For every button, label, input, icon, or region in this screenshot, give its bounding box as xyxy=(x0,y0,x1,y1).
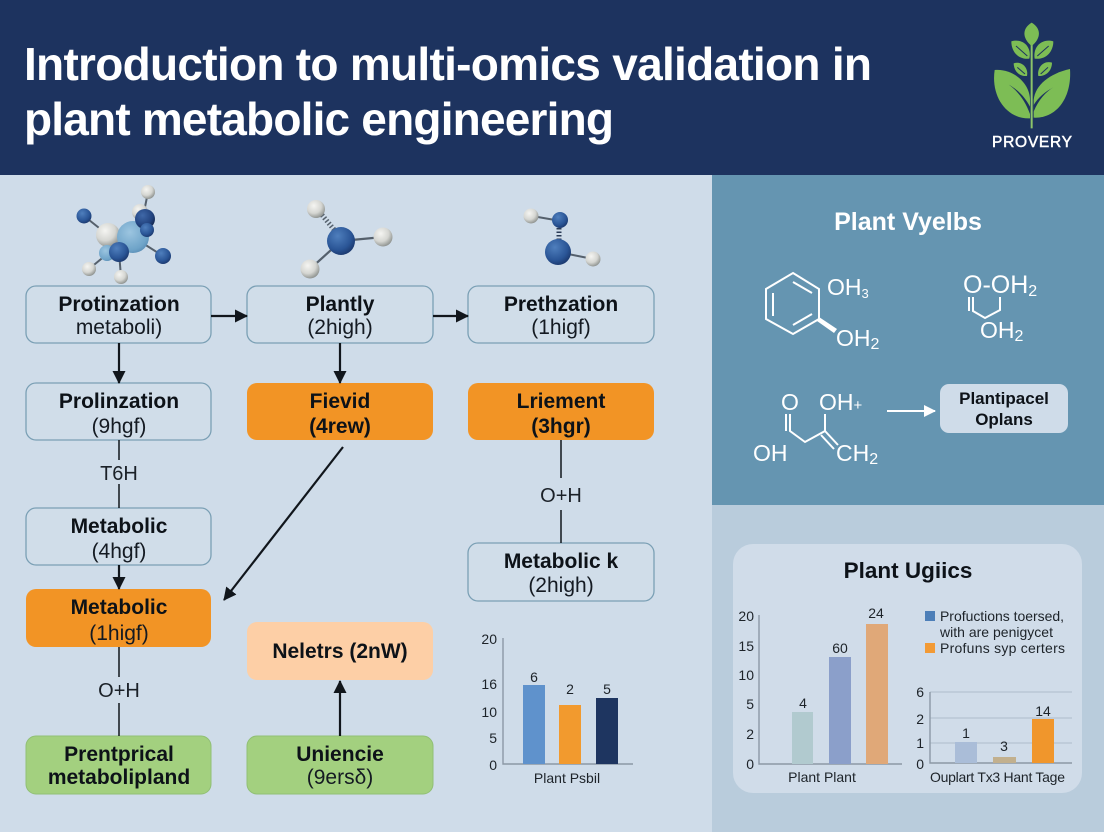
arrow: diagonal Fievid to Metabolic xyxy=(224,447,343,600)
bar chart: hant tage: 14 xyxy=(1035,703,1051,719)
bar chart: hant tage: 1 xyxy=(962,725,970,741)
bar chart: plant psbil: 5 xyxy=(489,730,497,746)
bar chart: plant plant xyxy=(738,605,902,785)
bar chart: plant plant: 24 xyxy=(868,605,884,621)
bar chart: plant plant: 10 xyxy=(738,667,754,683)
bar chart: plant psbil: 6 xyxy=(530,669,538,685)
node: Uniencie: Uniencie xyxy=(296,743,384,766)
bar chart: plant plant: 60 xyxy=(832,640,848,656)
node: Neletrs: Neletrs (2nW) xyxy=(272,640,408,663)
callout: Plantipacel Oplans: Oplans xyxy=(975,410,1033,429)
node: Prentprical metabolipland xyxy=(26,736,211,794)
title xyxy=(24,38,872,145)
bar chart: plant psbil xyxy=(481,631,633,786)
molecule: chain structure two: O xyxy=(781,389,799,415)
node: Prolinzation xyxy=(26,383,211,440)
bar chart: plant psbil: 0 xyxy=(489,757,497,773)
callout: Plantipacel Oplans: Plantipacel xyxy=(959,389,1049,408)
bar chart: plant psbil: 2 xyxy=(566,681,574,697)
header band xyxy=(0,0,1104,175)
bar chart: plant plant: 5 xyxy=(746,696,754,712)
bar chart: hant tage xyxy=(916,684,1072,785)
bar chart: plant plant: 20 xyxy=(738,608,754,624)
connector: O+H right: O+H xyxy=(540,485,582,507)
bar chart: hant tage: 0 xyxy=(916,756,924,772)
bar chart: hant tage: 1 xyxy=(916,735,924,751)
node: Prethzation: Prethzation xyxy=(504,293,618,316)
molecule: chain structure two: OH xyxy=(753,440,788,466)
node: Fievid: Fievid xyxy=(310,390,370,413)
molecule: ring structure: 3 xyxy=(862,286,869,301)
node: Metabolic 4 xyxy=(26,508,211,565)
connector: O+H left xyxy=(98,647,140,736)
node: Prentprical metabolipland: metabolipland xyxy=(48,766,190,789)
arrow: Uniencie to Neletrs xyxy=(339,681,341,736)
node: Metabolic k: Metabolic k xyxy=(504,550,618,573)
node: Lriement: Lriement xyxy=(517,390,605,413)
panel: lower right background xyxy=(712,505,1104,832)
card heading: Plant Ugiics xyxy=(844,558,972,583)
arrow: Plantly to Fievid xyxy=(339,343,341,383)
connector: T6H: T6H xyxy=(100,463,138,485)
molecule: ring structure: OH xyxy=(836,325,870,351)
node: Prolinzation: Prolinzation xyxy=(59,390,179,413)
legend: Profuctions toersed, xyxy=(940,608,1064,624)
arrow: Plantly to Prethzation xyxy=(433,315,468,317)
node: Metabolic 1: Metabolic xyxy=(71,596,168,619)
bar chart: plant psbil: 5 xyxy=(603,681,611,697)
legend: Profuns syp certers xyxy=(940,640,1065,656)
bar chart: plant plant: Plant Plant xyxy=(788,769,856,785)
node: Uniencie: (9ersδ) xyxy=(307,766,373,789)
node: Lriement xyxy=(468,383,654,440)
molecule: chain structure one: 2 xyxy=(1014,328,1024,345)
connector: T6H xyxy=(100,440,138,508)
molecule: chain structure two: OH+ xyxy=(819,389,862,415)
bar chart: plant psbil: 16 xyxy=(481,676,497,692)
connector: O+H left: O+H xyxy=(98,680,140,702)
bar chart: hant tage: Ouplart Tx3 Hant Tage xyxy=(930,769,1065,785)
molecule: ring structure: OH xyxy=(827,274,862,300)
molecule: chain structure one xyxy=(963,271,1037,345)
bar chart: plant plant: 15 xyxy=(738,638,754,654)
molecule: ring structure xyxy=(766,273,880,353)
legend: with are penigycet xyxy=(939,624,1053,640)
node: Fievid xyxy=(247,383,433,440)
molecule: cluster left xyxy=(76,185,171,284)
panel: plant pathways, right top xyxy=(712,175,1104,505)
node: Uniencie xyxy=(247,736,433,794)
node: Metabolic k: (2high) xyxy=(528,574,594,597)
node: Metabolic k xyxy=(468,543,654,601)
molecule: centre xyxy=(300,200,392,278)
node: Metabolic 1 xyxy=(26,589,211,647)
molecule: ring structure: 2 xyxy=(870,336,880,353)
node: Plantly xyxy=(247,286,433,343)
node: Metabolic 4: (4hgf) xyxy=(92,540,146,563)
bar chart: plant plant: 0 xyxy=(746,756,754,772)
molecule: chain structure two: CH xyxy=(836,440,869,466)
node: Plantly: Plantly xyxy=(306,293,375,316)
molecule: chain structure one: OH xyxy=(980,317,1014,343)
arrow to callout xyxy=(887,410,935,412)
molecule: chain structure two: 2 xyxy=(869,451,878,468)
legend xyxy=(925,608,1065,656)
node: Protinzation metaboli: Protinzation xyxy=(58,293,180,316)
panel heading: Plant Vyelbs xyxy=(834,208,982,236)
node: Fievid: (4rew) xyxy=(309,415,371,438)
node: Prentprical metabolipland: Prentprical xyxy=(64,743,174,766)
bar chart: hant tage: 6 xyxy=(916,684,924,700)
node: Prolinzation: (9hgf) xyxy=(92,415,146,438)
node: Prethzation xyxy=(468,286,654,343)
callout: Plantipacel Oplans xyxy=(940,384,1068,433)
molecule: right xyxy=(524,208,600,266)
node: Metabolic 4: Metabolic xyxy=(71,515,168,538)
molecule: chain structure one: 2 xyxy=(1028,283,1037,300)
bar chart: plant psbil: Plant Psbil xyxy=(534,770,600,786)
bar chart: hant tage: 2 xyxy=(916,711,924,727)
node: Neletrs xyxy=(247,622,433,680)
node: Metabolic 1: (1higf) xyxy=(89,622,149,645)
node: Protinzation metaboli xyxy=(26,286,211,343)
node: Protinzation metaboli: metaboli) xyxy=(76,316,162,339)
molecule: chain structure two xyxy=(753,389,878,468)
connector: O+H right xyxy=(540,440,582,543)
arrow: Protinzation to Plantly xyxy=(211,315,247,317)
molecule: chain structure one: O-OH xyxy=(963,271,1028,299)
node: Plantly: (2high) xyxy=(307,316,373,339)
node: Prethzation: (1higf) xyxy=(531,316,591,339)
bar chart: plant plant: 2 xyxy=(746,726,754,742)
panel: plant metrics card xyxy=(733,544,1082,793)
node: Lriement: (3hgr) xyxy=(531,415,591,438)
arrow: Protinzation to Prolinzation xyxy=(118,343,120,383)
bar chart: plant psbil: 20 xyxy=(481,631,497,647)
bar chart: plant plant: 4 xyxy=(799,695,807,711)
title: plant metabolic engineering xyxy=(24,93,614,145)
bar chart: plant psbil: 10 xyxy=(481,704,497,720)
logo: Provery plant xyxy=(992,23,1072,151)
title: Introduction to multi-omics validation in xyxy=(24,38,872,90)
logo wordmark: PROVERY xyxy=(992,134,1072,151)
arrow: Metabolic to Metabolic xyxy=(118,565,120,589)
bar chart: hant tage: 3 xyxy=(1000,738,1008,754)
